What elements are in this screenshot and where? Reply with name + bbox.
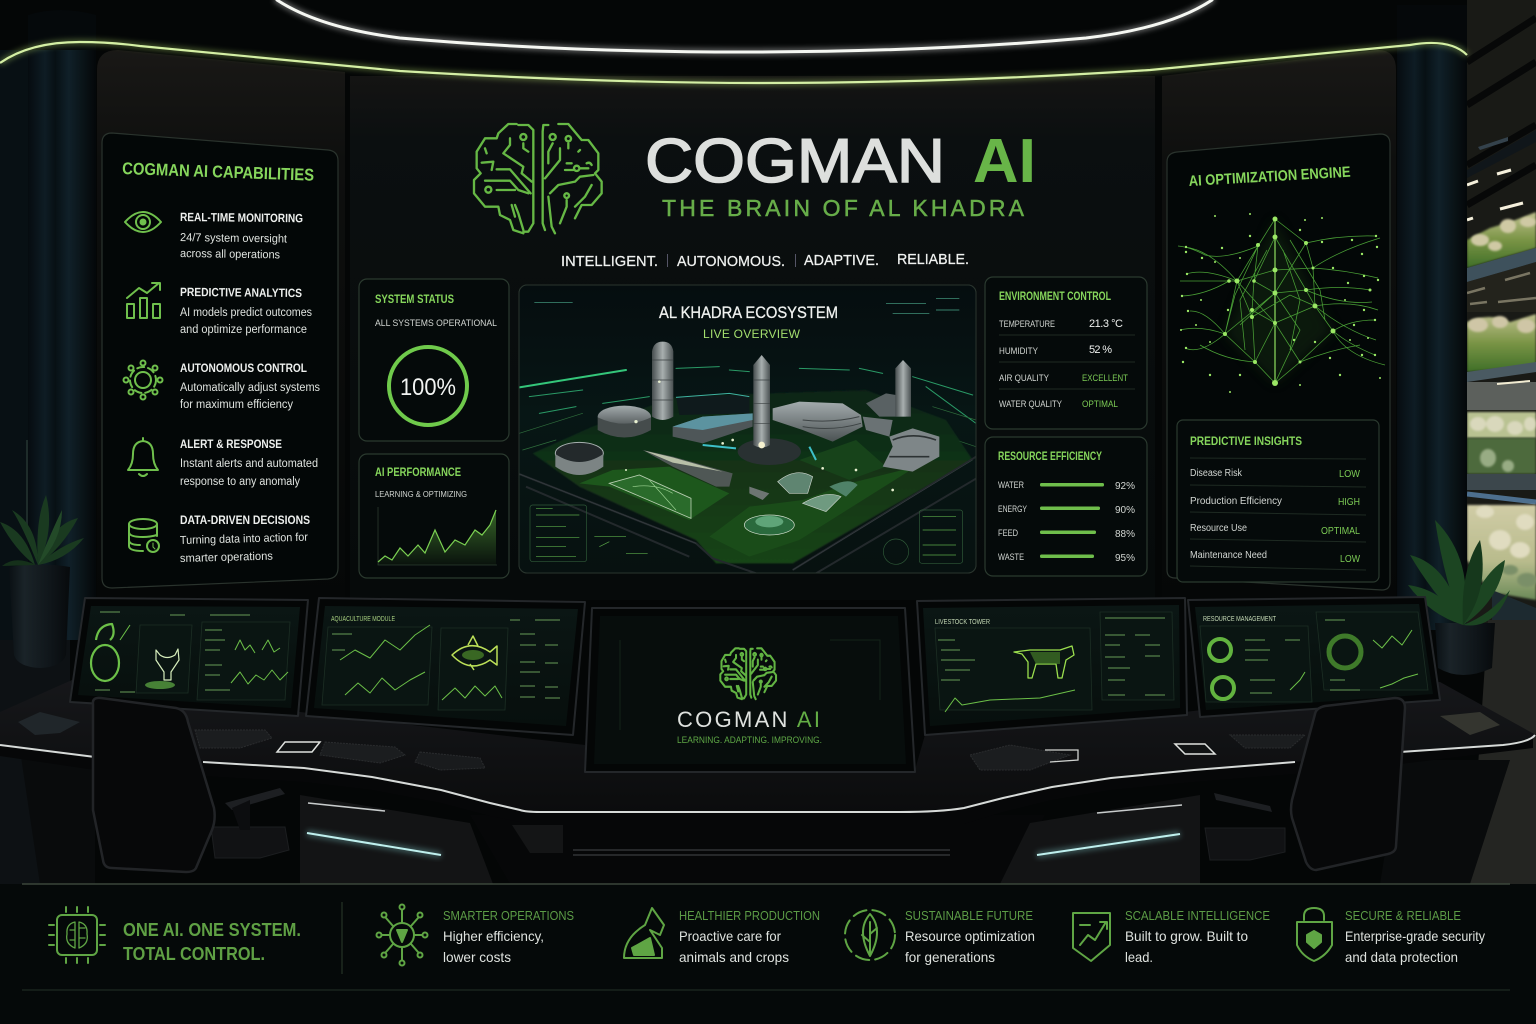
screen: central logo: COGMAN AI [677,707,820,732]
icon: ai chip [49,907,105,963]
feature: secure and reliable: and data protection [1345,949,1458,965]
capability: autonomous control: AUTONOMOUS CONTROL [180,361,307,375]
desk light strip [0,735,1535,812]
efficiency bars: 88% [1115,529,1135,540]
icon: analytics [127,283,160,318]
icon: scalable intelligence [1073,913,1110,961]
panel: environment control: 21.3 °C [1089,318,1123,330]
tagline: RELIABLE. [897,251,969,268]
panel: environment control: AIR QUALITY [999,373,1049,383]
title: COGMAN [645,127,945,196]
footer slogan: TOTAL CONTROL. [123,944,265,964]
screen: aquaculture module [306,598,585,735]
panel: predictive insights: PREDICTIVE INSIGHTS [1190,434,1302,448]
screen: central logo: LEARNING. ADAPTING. IMPROVING. [677,735,822,745]
screen: poultry module [70,598,308,716]
panel: environment control: EXCELLENT [1082,373,1128,383]
subtitle: THE BRAIN OF AL KHADRA [662,195,1025,221]
capability: real-time monitoring: across all operations [180,248,280,261]
panel: predictive insights: Maintenance Need [1190,550,1267,561]
capability: alert and response [180,437,318,488]
panel: system status [359,279,509,441]
icon: healthier production [624,908,664,958]
right chair [1205,698,1405,870]
screen: livestock tower: LIVESTOCK TOWER [935,617,990,626]
feature: scalable intelligence: SCALABLE INTELLIGENCE [1125,908,1270,923]
panel: environment control: ENVIRONMENT CONTROL [999,289,1111,303]
efficiency bars: WATER [998,480,1024,490]
wall panels [97,50,1396,600]
panel: predictive insights: Production Efficiency [1190,496,1282,507]
neural network graphic [1178,213,1385,393]
screen: resource management [1188,597,1440,717]
icon: brain logo [474,124,602,233]
feature: secure and reliable: SECURE & RELIABLE [1345,908,1461,923]
panel: ai optimization engine [1167,134,1390,590]
feature: healthier production [679,908,820,965]
panel: predictive insights: HIGH [1338,497,1360,508]
capability: alert and response: response to any anomaly [180,476,300,488]
panel: predictive insights: OPTIMAL [1321,526,1360,537]
feature: sustainable future: Resource optimization [905,928,1035,944]
panel: predictive insights [1177,420,1379,582]
footer slogan: ONE AI. ONE SYSTEM. [123,920,301,940]
capability: data-driven decisions: Turning data into action for [180,532,308,547]
capability: real-time monitoring: REAL-TIME MONITORING [180,210,303,225]
efficiency bars: 95% [1115,553,1135,564]
feature: smarter operations: Higher efficiency, [443,928,544,944]
efficiency bars: FEED [998,528,1018,538]
panel: predictive insights: LOW [1339,469,1361,480]
heading: COGMAN AI CAPABILITIES [122,159,314,185]
screen: resource management: RESOURCE MANAGEMENT [1203,614,1276,623]
panel: environment control [985,277,1147,429]
capability: predictive analytics: PREDICTIVE ANALYTICS [180,285,302,300]
feature: smarter operations: SMARTER OPERATIONS [443,908,574,923]
panel: resource efficiency [985,437,1147,576]
efficiency bars [998,480,1135,564]
capability: predictive analytics [180,285,312,336]
feature: sustainable future [905,908,1035,965]
feature: secure and reliable: Enterprise-grade security [1345,928,1485,944]
feature: scalable intelligence: lead. [1125,949,1153,965]
status ring: 100% [400,374,456,401]
ecosystem heading: AL KHADRA ECOSYSTEM [659,303,838,322]
capability: data-driven decisions: smarter operations [180,551,273,565]
efficiency bars: ENERGY [998,504,1027,514]
capability: data-driven decisions [180,513,310,565]
panel: resource efficiency: RESOURCE EFFICIENCY [998,449,1102,463]
icon: brain logo small [720,648,776,699]
status ring [389,347,467,425]
feature: scalable intelligence [1125,908,1270,965]
footer slogan [123,920,301,964]
under-desk light strips [307,803,1182,855]
panel: capabilities [102,133,338,588]
ceiling green light strip [0,42,1467,83]
feature: healthier production: Proactive care for [679,928,781,944]
panel: system status: SYSTEM STATUS [375,292,454,306]
icon: smarter operations [376,904,428,966]
screen: central logo [585,608,915,772]
line chart [378,507,497,565]
illustration: ecosystem campus [519,285,979,573]
panel: predictive insights: LOW [1340,554,1360,565]
tagline: AUTONOMOUS. [677,253,785,270]
capability: autonomous control [180,361,320,411]
footer band [0,884,1536,1024]
tagline: ADAPTIVE. [804,252,879,269]
panel: ai performance: AI PERFORMANCE [375,465,461,479]
icon: eye [125,212,161,232]
icon: database [129,519,159,552]
icon: secure and reliable [1297,908,1332,961]
title: AI [973,127,1036,196]
screen: livestock tower [917,598,1187,735]
left plant [0,495,84,668]
icon: sustainable future [845,910,895,960]
panel: ai performance [359,454,509,578]
feature: sustainable future: for generations [905,949,995,965]
efficiency bars: 92% [1115,481,1135,492]
feature: smarter operations: lower costs [443,949,511,965]
feature: secure and reliable [1345,908,1485,965]
live overview label: LIVE OVERVIEW [703,327,801,341]
efficiency bars: 90% [1115,505,1135,516]
capability: autonomous control: Automatically adjust systems [180,382,320,394]
feature: sustainable future: SUSTAINABLE FUTURE [905,908,1033,923]
panel: predictive insights: Resource Use [1190,523,1247,534]
capability: real-time monitoring: 24/7 system oversight [180,232,288,246]
right floor [1470,620,1536,884]
left chair [93,698,289,872]
feature: healthier production: HEALTHIER PRODUCTION [679,908,820,923]
capability: real-time monitoring [180,210,303,261]
panel: predictive insights: Disease Risk [1190,468,1243,479]
icon: bell [128,438,158,476]
capability: alert and response: ALERT & RESPONSE [180,437,282,451]
capability: predictive analytics: AI models predict outcomes [180,307,312,319]
left window and columns [0,5,1467,640]
capability: predictive analytics: and optimize performance [180,324,307,336]
capability: autonomous control: for maximum efficiency [180,399,293,411]
panel: environment control: 52 % [1089,344,1112,356]
engine heading: AI OPTIMIZATION ENGINE [1188,164,1351,190]
tagline: INTELLIGENT. [561,253,658,270]
panel: system status: ALL SYSTEMS OPERATIONAL [375,318,497,328]
screen: aquaculture module: AQUACULTURE MODULE [331,614,395,623]
farm view through window [1467,0,1536,625]
capability: data-driven decisions: DATA-DRIVEN DECISIONS [180,513,310,527]
efficiency bars: WASTE [998,552,1024,562]
desk controls [18,712,1500,770]
panel: environment control: OPTIMAL [1082,399,1118,409]
panel: ecosystem overview [519,285,979,573]
panel: environment control: TEMPERATURE [999,319,1055,329]
tagline [561,251,969,270]
control desk [0,680,1536,884]
left floor [0,630,70,884]
panel: ai performance: LEARNING & OPTIMIZING [375,489,467,499]
ceiling ring light [277,0,1212,52]
right plant [1408,520,1510,675]
icon: gear [124,360,162,400]
feature: smarter operations [443,908,574,965]
panel: environment control: HUMIDITY [999,346,1038,356]
panel: environment control: WATER QUALITY [999,399,1062,409]
feature: healthier production: animals and crops [679,949,789,965]
feature: scalable intelligence: Built to grow. Built to [1125,928,1248,944]
capability: alert and response: Instant alerts and automated [180,458,318,470]
